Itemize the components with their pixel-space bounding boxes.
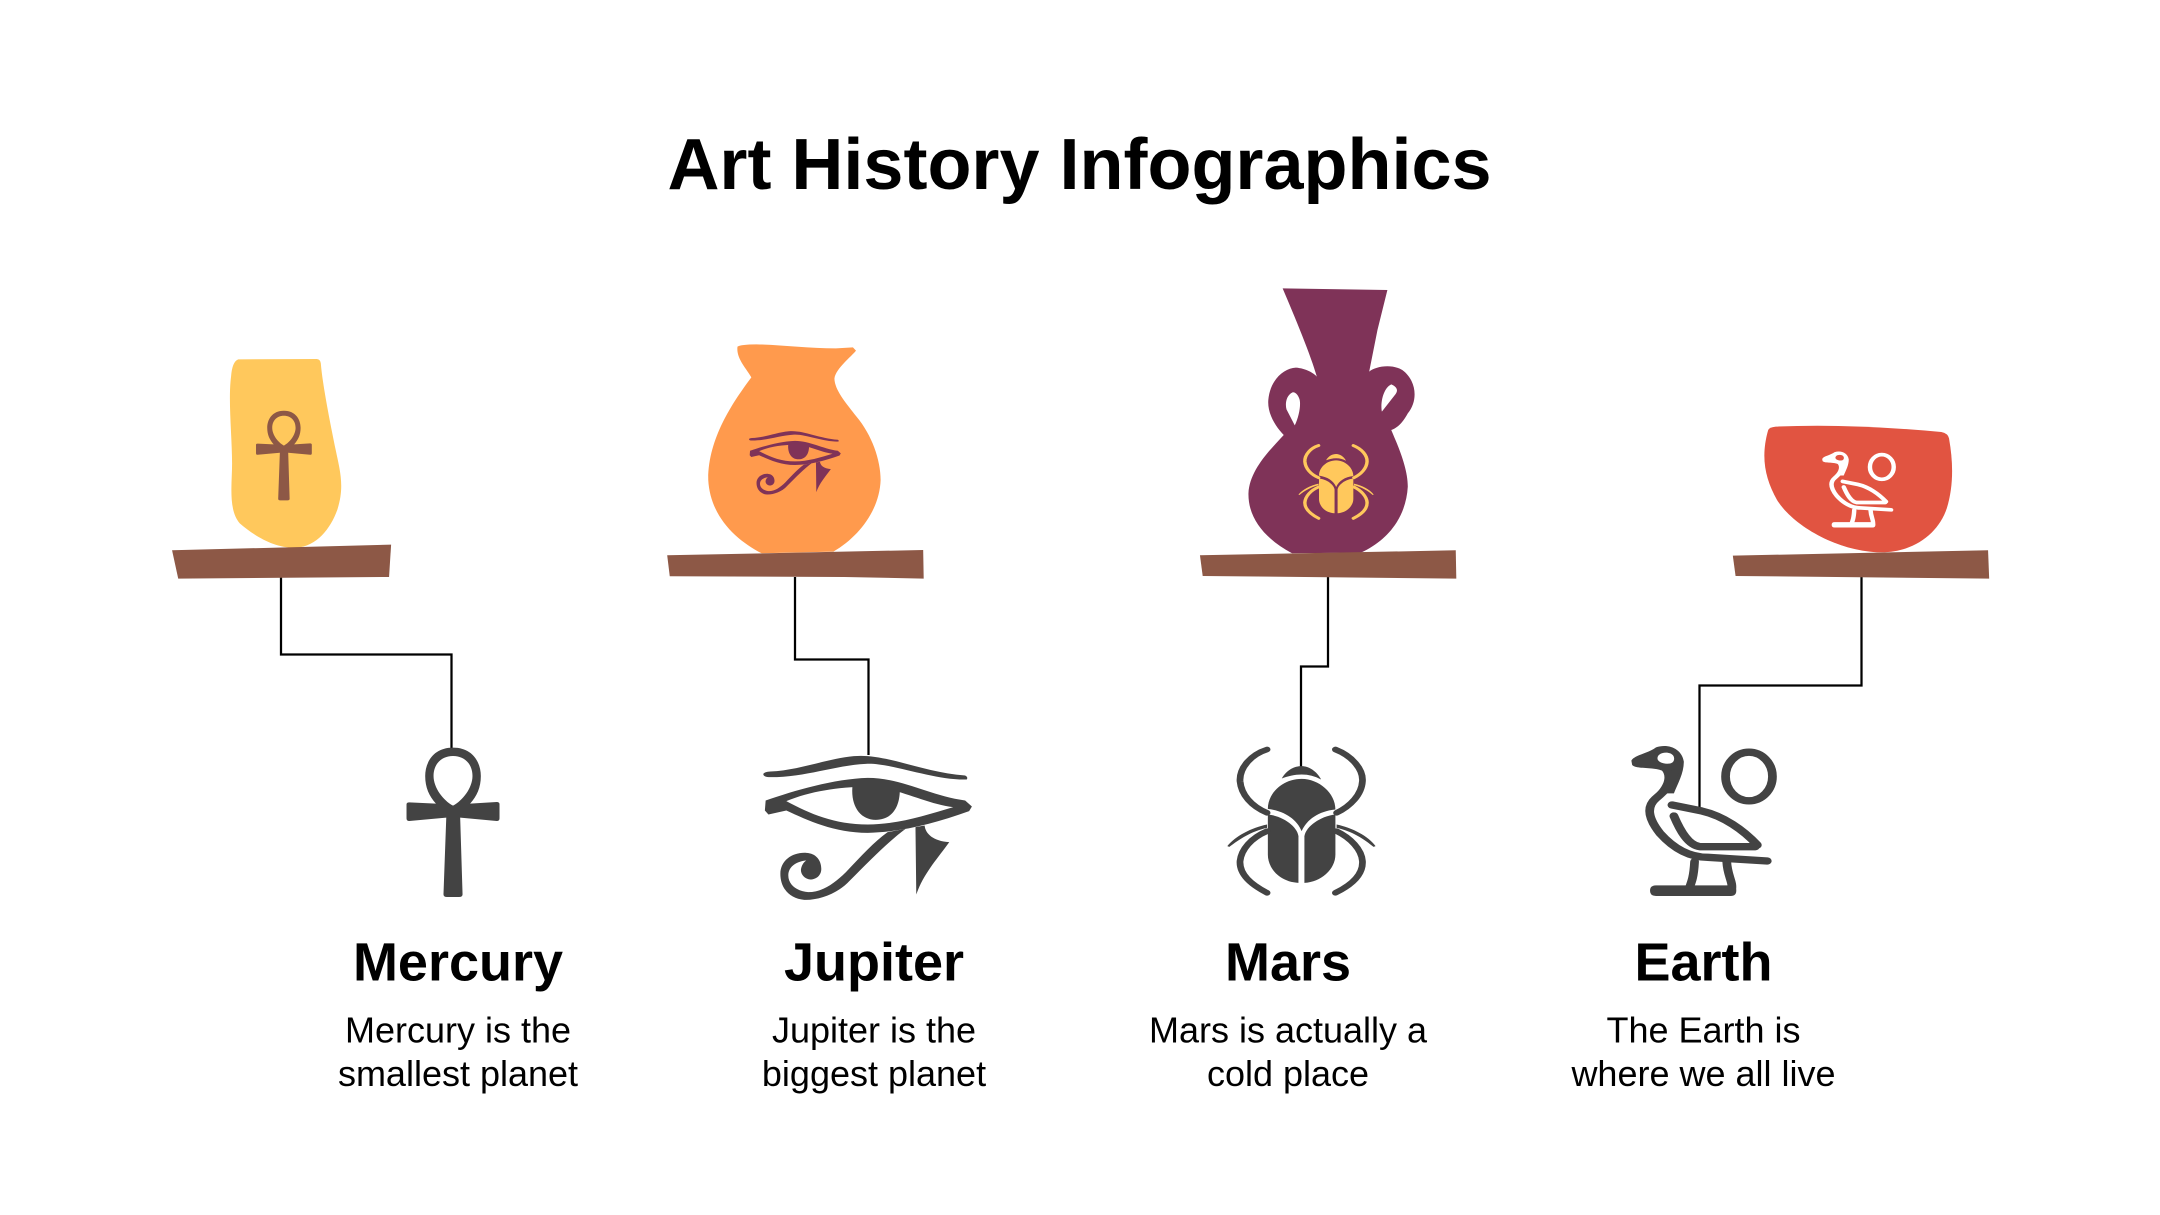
icon: small ankh on vase [256, 411, 312, 500]
panel: Mercury vase on shelf [172, 359, 391, 579]
heading: Mercury: Mercury [353, 932, 563, 992]
panel: Earth bowl on shelf [1733, 426, 1989, 579]
text block: Mercury [338, 932, 578, 1094]
icon: scarab [1227, 749, 1376, 893]
vase: purple [1248, 288, 1415, 553]
description: Mercury: smallest planet [338, 1053, 578, 1094]
shelf [1733, 550, 1989, 579]
icon: eye of Horus [763, 756, 972, 900]
icon: bird and sun [1631, 746, 1772, 896]
connector: Earth [1700, 577, 1862, 813]
text block: Mars [1149, 932, 1428, 1094]
description: Mercury: Mercury is the [345, 1010, 571, 1050]
icon: small eye of Horus on vase [749, 431, 841, 495]
panel: Mars vase on shelf [1200, 288, 1456, 579]
text block: Earth [1570, 932, 1836, 1094]
icon: small bird on bowl [1822, 452, 1894, 528]
vase: yellow [230, 359, 341, 548]
description: Mars: Mars is actually a [1149, 1010, 1427, 1050]
description: Mars: cold place [1207, 1053, 1369, 1094]
icon: small scarab on vase [1298, 446, 1374, 518]
shelf [172, 545, 391, 579]
shelf [667, 550, 924, 579]
connector: Mercury [281, 577, 452, 749]
heading: Jupiter: Jupiter [784, 932, 964, 992]
description: Jupiter: Jupiter is the [772, 1010, 976, 1050]
connector: Jupiter [795, 577, 868, 755]
description: Earth: where we all live [1570, 1053, 1836, 1094]
description: Jupiter: biggest planet [762, 1053, 986, 1094]
shelf [1200, 550, 1456, 579]
heading: Earth: Earth [1634, 932, 1773, 992]
panel: Jupiter vase on shelf [667, 344, 924, 579]
title: Art History Infographics [667, 125, 1492, 205]
heading: Mars: Mars [1225, 932, 1351, 992]
description: Earth: The Earth is [1606, 1010, 1801, 1050]
bowl: red [1764, 426, 1952, 552]
connector: Mars [1301, 577, 1328, 770]
icon: ankh [407, 748, 500, 897]
vase: orange [708, 344, 881, 553]
text block: Jupiter [762, 932, 986, 1094]
